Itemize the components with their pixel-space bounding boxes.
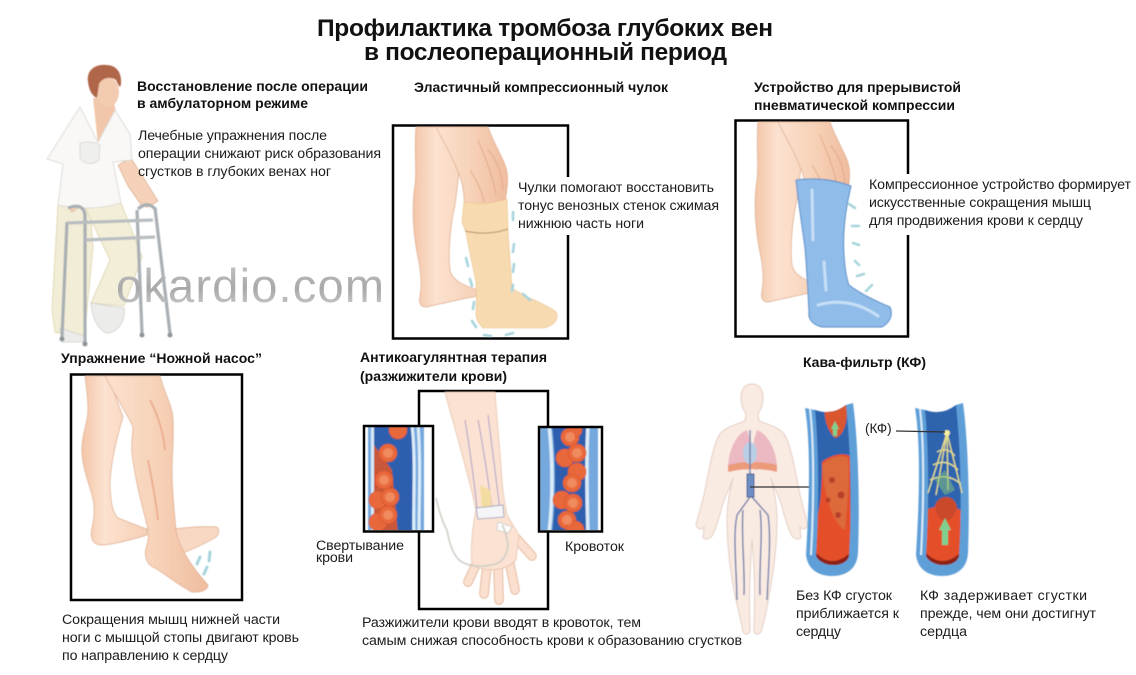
text: with filter bbox=[920, 588, 1096, 640]
text: with filter: КФ задерживает сгустки bbox=[920, 588, 1087, 604]
watermark: okardio.com bbox=[116, 259, 384, 312]
label: clotting bbox=[316, 538, 404, 566]
illustration: patient with walker bbox=[47, 65, 172, 346]
inset: normal blood flow bbox=[539, 423, 602, 539]
illustration: body with veins bbox=[696, 384, 808, 634]
panel: anticoagulant therapy bbox=[316, 349, 742, 649]
text: stockings restore tone: тонус венозных стенок сжимая bbox=[518, 198, 719, 214]
text: compression device bbox=[869, 177, 1132, 229]
text: without filter: сердцу bbox=[796, 624, 842, 640]
title: в послеоперационный период bbox=[364, 39, 727, 66]
frame: pneumatic bbox=[736, 120, 908, 336]
illustration: leg with stocking bbox=[413, 127, 557, 336]
illustration: vessel without filter bbox=[805, 402, 859, 576]
heading: anticoagulants bbox=[360, 349, 547, 384]
text: foot pump description: Сокращения мышц нижней части bbox=[62, 612, 280, 628]
frame: foot pump bbox=[71, 374, 242, 600]
text: compression device: Компрессионное устройство формирует bbox=[869, 177, 1132, 193]
frame: arm bbox=[419, 391, 548, 609]
heading: stocking: Эластичный компрессионный чулок bbox=[414, 79, 669, 95]
heading: pneumatic compression: Устройство для прерывистой bbox=[754, 79, 961, 95]
text: stockings restore tone: нижнюю часть ноги bbox=[518, 216, 644, 232]
panel: foot pump exercise bbox=[61, 350, 299, 664]
panel: cava filter bbox=[696, 354, 1096, 640]
callout: filter label bbox=[865, 421, 945, 436]
heading: ambulatory recovery: Восстановление после операции bbox=[137, 78, 368, 94]
illustration: arm with drip bbox=[436, 392, 532, 600]
text: exercises reduce risk: Лечебные упражнения после bbox=[138, 128, 327, 144]
heading: foot pump: Упражнение “Ножной насос” bbox=[61, 350, 262, 366]
panel: elastic compression stocking bbox=[393, 79, 719, 338]
label: blood flow: Кровоток bbox=[565, 539, 625, 555]
frame: stocking bbox=[393, 126, 568, 338]
callout: filter label: (КФ) bbox=[865, 421, 892, 436]
text: without filter bbox=[796, 588, 900, 640]
heading: anticoagulants: Антикоагулянтная терапия bbox=[360, 349, 547, 365]
text: anticoagulant description bbox=[362, 615, 742, 649]
text: foot pump description: по направлению к сердцу bbox=[62, 648, 229, 664]
text: stockings restore tone: Чулки помогают восстановить bbox=[518, 180, 714, 196]
panel: pneumatic compression device bbox=[736, 79, 1132, 336]
leader line: vena cava bbox=[750, 486, 813, 488]
heading: cava filter: Кава-фильтр (КФ) bbox=[803, 354, 926, 370]
text: exercises reduce risk: операции снижают риск образования bbox=[138, 146, 381, 162]
illustration: legs with foot flexed bbox=[82, 376, 219, 592]
text: without filter: Без КФ сгусток bbox=[796, 588, 893, 604]
text: anticoagulant description: Разжижители крови вводят в кровоток, тем bbox=[362, 615, 641, 631]
text: compression device: для продвижения крови к сердцу bbox=[869, 213, 1084, 229]
heading: ambulatory recovery: в амбулаторном режиме bbox=[137, 95, 308, 111]
text: foot pump description: ноги с мышцой стопы двигают кровь bbox=[62, 630, 299, 646]
label: clotting: Свертывание bbox=[316, 538, 404, 554]
heading: anticoagulants: (разжижители крови) bbox=[360, 368, 507, 384]
heading: ambulatory recovery bbox=[137, 78, 368, 111]
text: stockings restore tone bbox=[518, 180, 719, 232]
title bbox=[317, 15, 773, 66]
text: with filter: сердца bbox=[920, 624, 967, 640]
heading: pneumatic compression: пневматической компрессии bbox=[754, 97, 955, 113]
text: exercises reduce risk bbox=[138, 128, 381, 180]
inset: clotting vessel bbox=[364, 421, 433, 533]
illustration: leg with pneumatic boot bbox=[755, 122, 891, 327]
text: exercises reduce risk: сгустков в глубоких венах ног bbox=[138, 164, 331, 180]
text: anticoagulant description: самым снижая способность крови к образованию сгустков bbox=[362, 633, 742, 649]
label: clotting: крови bbox=[316, 550, 353, 566]
panel: ambulatory recovery bbox=[47, 65, 381, 346]
title: Профилактика тромбоза глубоких вен bbox=[317, 15, 773, 42]
text: with filter: прежде, чем они достигнут bbox=[920, 606, 1096, 622]
illustration: vessel with filter bbox=[915, 403, 969, 576]
text: foot pump description bbox=[62, 612, 299, 664]
text: compression device: искусственные сокращения мышц bbox=[869, 195, 1091, 211]
heading: pneumatic compression bbox=[754, 79, 961, 113]
text: without filter: приближается к bbox=[796, 606, 900, 622]
